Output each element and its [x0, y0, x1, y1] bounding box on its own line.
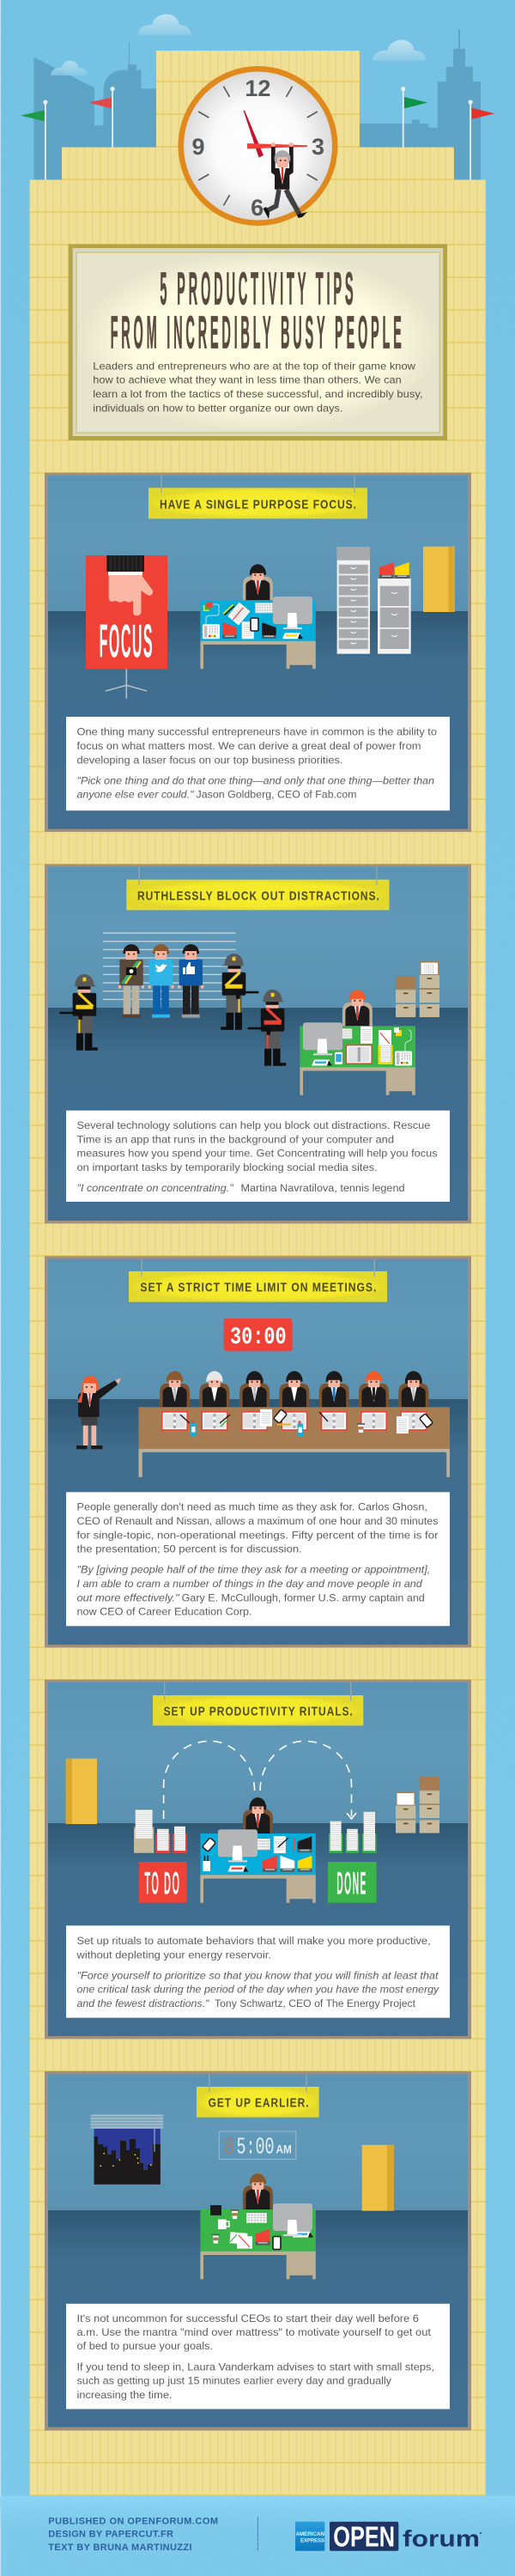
done label [328, 1862, 377, 1903]
presenter [76, 1376, 121, 1449]
panel 4: productivity rituals [45, 1680, 471, 2039]
desk items [312, 1027, 412, 1066]
blue desk [200, 1829, 316, 1903]
footer divider [257, 2517, 258, 2551]
digital wall clock [219, 2131, 296, 2161]
blue desk [200, 597, 316, 669]
clock numerals: 12 [245, 76, 270, 101]
open forum logo: OPEN [333, 2521, 395, 2553]
stacked beige cabinets [396, 961, 439, 1017]
text box: a.m. Use the mantra "mind over mattress" to motivate yourself to get out [77, 2326, 432, 2338]
yellow door [362, 2145, 394, 2211]
person at desk [342, 990, 373, 1026]
person at desk [243, 2173, 273, 2209]
text box: out more effectively." [77, 1591, 179, 1603]
panel 4: productivity rituals: DONE [336, 1866, 367, 1901]
stacked beige cabinets [396, 1777, 439, 1834]
heading sign [197, 2074, 319, 2118]
heading sign [129, 1259, 387, 1302]
digital wall clock: 8 [223, 2136, 235, 2161]
height chart lines [103, 933, 236, 999]
footer credits: PUBLISHED ON OPENFORUM.COM [48, 2516, 218, 2526]
text box: one critical task during the period of the day when you have the most energy [77, 1984, 439, 1996]
heading sign: SET UP PRODUCTIVITY RITUALS. [164, 1704, 354, 1718]
flag: red left [88, 87, 115, 148]
text box [66, 1925, 450, 2018]
police officer: middle [221, 954, 259, 1030]
short filing cabinet with binders [378, 562, 411, 654]
intro text [93, 360, 423, 414]
text box: such as getting up just 15 minutes earlier every day and gradually [77, 2375, 392, 2387]
intro text: individuals on how to better organize our own days. [93, 402, 343, 414]
text box: Several technology solutions can help you block out distractions. Rescue [77, 1119, 431, 1131]
yellow door [423, 547, 455, 612]
desk items [210, 2205, 313, 2249]
footer credits: TEXT BY BRUNA MARTINUZZI [48, 2543, 191, 2553]
suspect: instagram [118, 944, 144, 1018]
tall filing cabinet [337, 547, 370, 654]
text box: If you tend to sleep in, Laura Vanderkam advises to start with small steps, [77, 2361, 434, 2373]
intro text: Leaders and entrepreneurs who are at the top of their game know [93, 360, 415, 372]
text box: I am able to cram a number of things in the day and move people in and [77, 1578, 423, 1590]
intro text: how to achieve what they want in less time than others. We can [93, 374, 402, 386]
text box: "I concentrate on concentrating." [77, 1182, 233, 1194]
text box: Jason Goldberg, CEO of Fab.com [196, 789, 357, 801]
digital wall clock: 5:00 [237, 2136, 275, 2161]
to do stacks [134, 1809, 187, 1853]
suspect: twitter [148, 944, 173, 1018]
conference table [139, 1407, 450, 1477]
police officer: left [59, 974, 98, 1051]
text box: Martina Navratilova, tennis legend [240, 1182, 405, 1194]
panel 3: time limit on meetings [45, 1256, 471, 1647]
text box: "Force yourself to prioritize so that you know that you will finish at least that [77, 1969, 439, 1981]
text box [66, 1111, 450, 1202]
american express logo [295, 2522, 325, 2551]
footer band [0, 2496, 515, 2531]
text box: CEO of Renault and Nissan, allows a maximum of one hour and 30 minutes [77, 1515, 438, 1527]
panel 1: single purpose focus [45, 473, 471, 832]
cloud: top center [138, 14, 191, 35]
heading sign: HAVE A SINGLE PURPOSE FOCUS. [160, 497, 357, 512]
intro panel [69, 244, 447, 440]
text box: Tony Schwartz, CEO of The Energy Project [215, 1997, 416, 2009]
text box: of bed to pursue your goals. [77, 2340, 213, 2352]
focus poster [86, 555, 167, 699]
footer credits [48, 2516, 218, 2553]
cloud: right [373, 39, 426, 61]
green desk [300, 1022, 415, 1095]
meeting attendees [160, 1371, 428, 1407]
notebooks and table items [161, 1409, 433, 1437]
intro text: learn a lot from the tactics of these successful, and incredibly busy, [93, 388, 423, 400]
text box [66, 717, 450, 810]
text box: Set up rituals to automate behaviors that will make you more productive, [77, 1935, 431, 1947]
text box: "Pick one thing and do that one thing—and only that one thing—better than [77, 774, 434, 786]
person at desk [243, 564, 273, 600]
text box: One thing many successful entrepreneurs have in common is the ability to [77, 726, 437, 738]
heading sign: RUTHLESSLY BLOCK OUT DISTRACTIONS. [137, 888, 380, 903]
skyline: right [360, 29, 481, 179]
yellow door [65, 1759, 97, 1824]
businessman hanging from clock hand [263, 142, 307, 219]
panel 2: block out distractions [45, 864, 471, 1223]
panel 5: get up earlier [45, 2071, 471, 2431]
clock numerals: 6 [251, 195, 264, 221]
text box: measures how you spend your time. Get Concentrating will help you focus [77, 1148, 438, 1160]
footer credits: DESIGN BY PAPERCUT.FR [48, 2529, 173, 2539]
text box [66, 2304, 450, 2409]
police officer: red sash [248, 990, 286, 1066]
clock [179, 66, 338, 226]
text box: People generally don't need as much time as they ask for. Carlos Ghosn, [77, 1501, 427, 1513]
flag: red right [469, 100, 494, 179]
countdown timer: 30:00 [230, 1324, 287, 1351]
person at desk [243, 1797, 273, 1834]
text box: increasing the time. [77, 2389, 172, 2401]
digital wall clock: AM [276, 2143, 292, 2156]
text box: developing a laser focus on our top business priorities. [77, 754, 343, 766]
clock numerals: 9 [191, 134, 205, 160]
heading sign [126, 867, 390, 910]
open forum logo: forum [403, 2526, 480, 2552]
countdown timer [224, 1318, 293, 1351]
cloud: left [51, 61, 88, 76]
suspect: facebook [178, 944, 203, 1018]
text box: and the fewest distractions." [77, 1997, 209, 2009]
text box: without depleting your energy reservoir. [76, 1949, 271, 1961]
night window [91, 2114, 163, 2185]
panel 1: single purpose focus: FOCUS [100, 614, 154, 667]
heading sign [148, 476, 367, 518]
dashed arrows [164, 1741, 356, 1819]
heading sign [153, 1682, 363, 1725]
skyline: left [33, 42, 156, 179]
done stacks [329, 1812, 377, 1853]
american express logo: AMERICAN [295, 2531, 324, 2537]
flag: green right [401, 87, 427, 148]
text box [66, 1492, 450, 1626]
text box: It's not uncommon for successful CEOs to start their day well before 6 [77, 2312, 419, 2324]
title [111, 264, 405, 359]
heading sign: SET A STRICT TIME LIMIT ON MEETINGS. [140, 1280, 377, 1294]
american express logo: EXPRESS [300, 2537, 325, 2544]
text box: focus on what matters most. We can derive a great deal of power from [77, 740, 421, 752]
flag: green left [21, 100, 48, 179]
panel 4: productivity rituals: TO DO [144, 1866, 180, 1901]
text box: now CEO of Career Education Corp. [77, 1606, 252, 1618]
to do label [139, 1862, 187, 1903]
open forum logo [330, 2521, 482, 2553]
clock numerals [191, 76, 324, 221]
text box: "By [giving people half of the time they ask for a meeting or appointment], [77, 1564, 430, 1576]
text box: Time is an app that runs in the background of your computer and [77, 1133, 394, 1145]
text box: on important tasks by temporarily blocking social media sites. [77, 1161, 378, 1173]
text box: for single-topic, non-operational meetings. Fifty percent of the time is for [77, 1529, 438, 1541]
desk items [203, 603, 303, 639]
text box: Gary E. McCullough, former U.S. army captain and [182, 1591, 425, 1603]
heading sign: GET UP EARLIER. [209, 2096, 309, 2110]
clock hands [244, 111, 307, 158]
green desk [200, 2203, 316, 2279]
desk items [203, 1836, 312, 1872]
clock numerals: 3 [312, 134, 324, 160]
clock ticks [198, 87, 318, 205]
text box: anyone else ever could." [77, 789, 194, 801]
text box: the presentation; 50 percent is for discussion. [77, 1543, 302, 1555]
